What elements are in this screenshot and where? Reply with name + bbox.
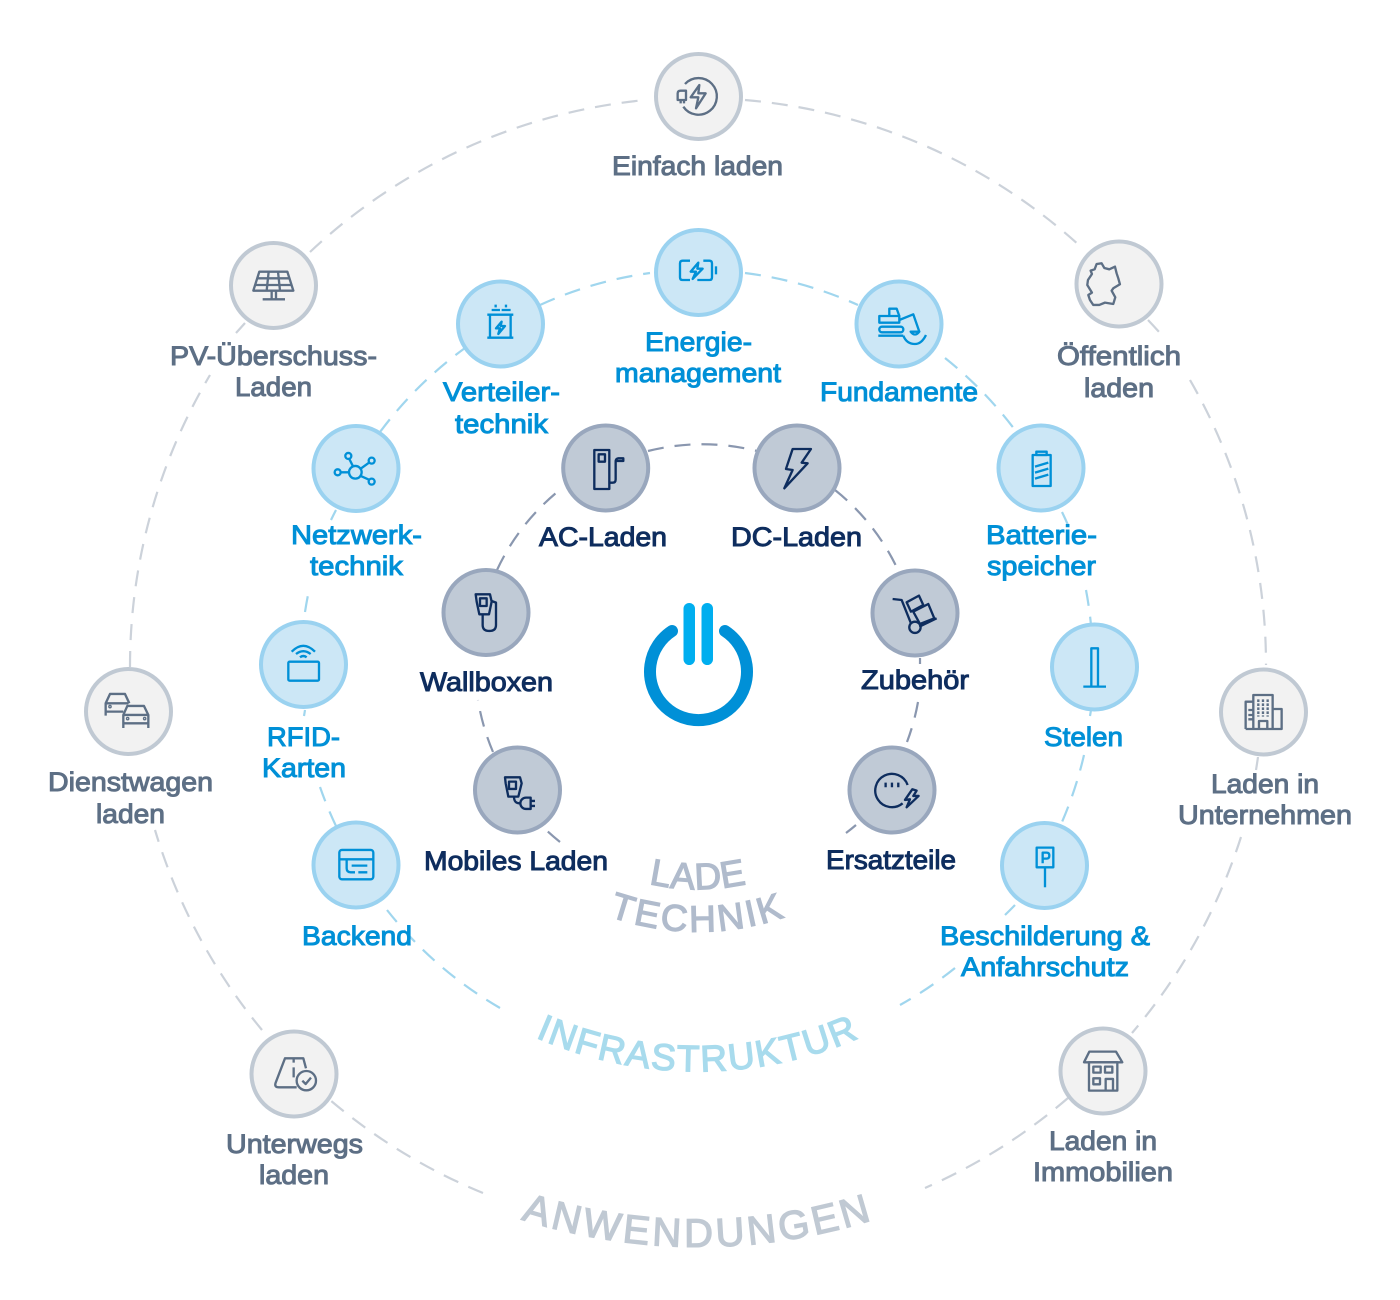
icon: network nodes (335, 453, 375, 485)
label: laden (259, 1160, 329, 1190)
icon: mobile charger (505, 777, 535, 809)
label (291, 520, 422, 581)
label: Beschilderung & (940, 921, 1150, 951)
label: PV-Überschuss- (170, 341, 377, 371)
node: Einfach laden (612, 54, 783, 181)
node: Laden in Unternehmen (1178, 670, 1352, 830)
icon: charging station (594, 450, 623, 489)
label: Zubehör (861, 665, 969, 695)
label (940, 921, 1150, 982)
node: Ersatzteile (826, 748, 956, 875)
label: Öffentlich (1057, 341, 1181, 371)
label: AC-Laden (539, 522, 667, 552)
icon: excavator (878, 309, 926, 344)
label: RFID- (267, 722, 340, 752)
node: Fundamente (820, 282, 978, 407)
node: DC-Laden (731, 426, 862, 552)
label: speicher (987, 551, 1096, 581)
label: Netzwerk- (291, 520, 422, 550)
label (262, 722, 346, 783)
node: AC-Laden (539, 426, 667, 552)
node: Stelen (1044, 624, 1137, 752)
label: Unterwegs (226, 1129, 363, 1159)
node: Zubehör (861, 570, 969, 695)
label: Mobiles Laden (424, 846, 608, 876)
icon: house (1084, 1052, 1122, 1091)
label (1033, 1126, 1173, 1187)
icon: stele (1083, 648, 1106, 687)
label: Stelen (1044, 722, 1123, 752)
label: Anfahrschutz (961, 952, 1129, 982)
power symbol (650, 603, 747, 720)
icon: RFID card (288, 646, 319, 681)
curved heading: Ladetechnik: LADE (651, 858, 746, 890)
icon: battery with bolt (680, 261, 716, 280)
curved heading: Ladetechnik: TECHNIK (615, 892, 786, 932)
icon: road with check (275, 1058, 316, 1090)
node: Wallboxen (420, 570, 553, 697)
label: laden (96, 799, 165, 829)
curved heading: Anwendungen: ANWENDUNGEN (520, 1194, 870, 1248)
icon: backend window (339, 850, 373, 879)
label (443, 377, 560, 439)
label: Energie- (645, 327, 752, 357)
node: Dienstwagen laden (48, 669, 213, 829)
node: Batteriespeicher (986, 426, 1097, 581)
label: management (615, 358, 782, 388)
label: Ersatzteile (826, 845, 956, 875)
icon: distribution cabinet (487, 305, 513, 338)
label: Laden in (1211, 769, 1319, 799)
node: Energiemanagement (615, 230, 782, 388)
node: Netzwerktechnik (291, 426, 422, 581)
icon: solar panel (253, 272, 293, 299)
node: PV-Überschuss-Laden (170, 243, 377, 402)
curved heading: Ladetechnik (615, 858, 786, 932)
label: Karten (262, 753, 346, 783)
node: Verteilertechnik (443, 282, 560, 439)
icon: parking sign (1037, 848, 1053, 887)
label: technik (455, 409, 549, 439)
icon: socket with bolt (875, 774, 919, 807)
middle dashed ring: Infrastruktur (304, 273, 1091, 1008)
label: Backend (302, 921, 412, 951)
label (226, 1129, 363, 1190)
node: Laden in Immobilien (1033, 1028, 1173, 1187)
icon: map of Germany (1087, 263, 1120, 305)
node: Mobiles Laden (424, 748, 608, 876)
label: laden (1084, 373, 1154, 403)
label: Batterie- (986, 520, 1097, 550)
node: Öffentlich laden (1057, 242, 1181, 403)
label: DC-Laden (731, 522, 862, 552)
label (1178, 769, 1352, 830)
icon: plug with bolt (678, 78, 717, 115)
label: Unternehmen (1178, 800, 1352, 830)
label (615, 327, 782, 388)
icon: lightning bolt (784, 449, 811, 488)
label: technik (310, 551, 404, 581)
icon: wallbox (476, 594, 496, 631)
label: Dienstwagen (48, 767, 213, 797)
label: Einfach laden (612, 151, 783, 181)
label (1057, 341, 1181, 403)
node: RFID-Karten (261, 622, 346, 783)
label: Laden (235, 372, 312, 402)
icon: office building (1246, 695, 1282, 729)
icon: hand truck with boxes (893, 596, 937, 633)
label (170, 341, 377, 402)
label: Immobilien (1033, 1157, 1173, 1187)
node: Unterwegs laden (226, 1032, 363, 1190)
inner dashed ring: Ladetechnik (478, 444, 920, 842)
label (48, 767, 213, 829)
label: Laden in (1049, 1126, 1157, 1156)
label: Fundamente (820, 377, 978, 407)
outer dashed ring: Anwendungen (130, 100, 1266, 1193)
label (986, 520, 1097, 581)
icon: two cars (106, 694, 148, 728)
label: Verteiler- (443, 377, 560, 407)
icon: battery storage (1033, 452, 1051, 486)
label: Wallboxen (420, 667, 553, 697)
curved heading: Infrastruktur: INFRASTRUKTUR (538, 1014, 859, 1072)
node: Backend (302, 822, 412, 951)
node: Beschilderung und Anfahrschutz (940, 823, 1150, 982)
